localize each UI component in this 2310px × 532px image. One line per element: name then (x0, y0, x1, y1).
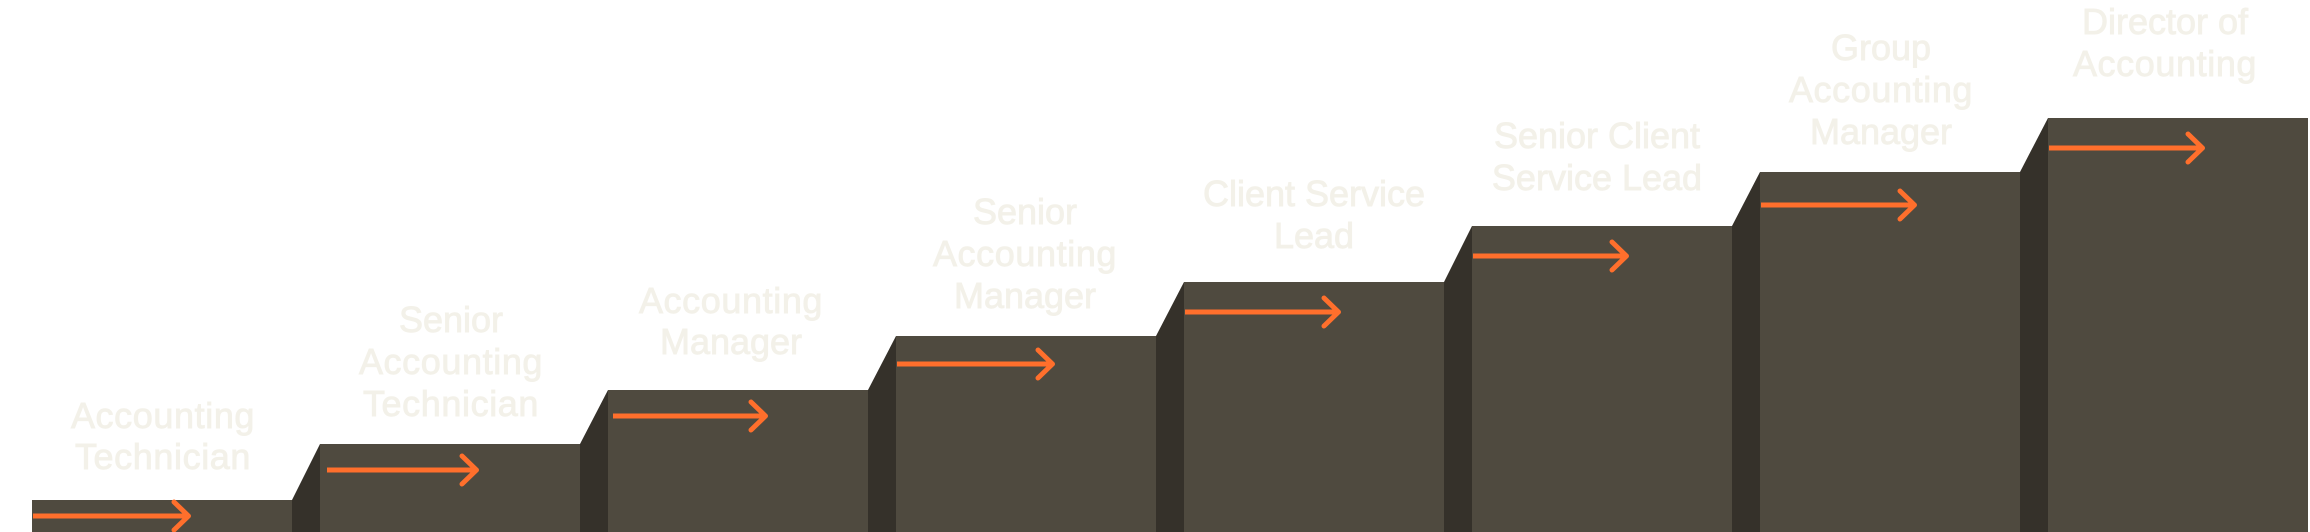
step 3: Accounting Manager (580, 280, 868, 532)
step 6 riser (1444, 226, 1472, 532)
step 7 arrow (1761, 191, 1914, 219)
step 4: Senior Accounting Manager (868, 191, 1156, 532)
step 7 label: Manager (1810, 111, 1952, 152)
step 2: Senior Accounting Technician (292, 299, 580, 532)
step 3 arrow (613, 402, 766, 430)
step 6 label: Service Lead (1492, 157, 1702, 198)
step 7 label: Accounting (1789, 69, 1973, 110)
step 7 block (1760, 172, 2020, 532)
step 1 label: Technician (75, 436, 251, 477)
step 1 label: Accounting (71, 395, 255, 436)
step 5 riser (1156, 282, 1184, 532)
step 3 block (608, 390, 868, 532)
step 5 block (1184, 282, 1444, 532)
step 8 label: Accounting (2073, 43, 2257, 84)
step 4 label: Manager (954, 275, 1096, 316)
step 7 riser (1732, 172, 1760, 532)
step 4 arrow (897, 350, 1052, 378)
step 8: Director of Accounting (2020, 1, 2308, 532)
step 2 label: Accounting (359, 341, 543, 382)
step 5 label: Lead (1274, 215, 1354, 256)
step 4 block (896, 336, 1156, 532)
step 2 label: Senior (399, 299, 503, 340)
step 1 block (32, 500, 292, 532)
step 8 arrow (2049, 134, 2202, 162)
step 3 label: Accounting (639, 280, 823, 321)
step 8 block (2048, 118, 2308, 532)
step 4 riser (868, 336, 896, 532)
step 2 block (320, 444, 580, 532)
step 2 arrow (327, 456, 476, 484)
step 2 riser (292, 444, 320, 532)
step 8 label: Director of (2082, 1, 2249, 42)
step 1 arrow (33, 502, 188, 530)
step 3 riser (580, 390, 608, 532)
step 6: Senior Client Service Lead (1444, 115, 1732, 532)
step 6 label: Senior Client (1494, 115, 1700, 156)
step 7: Group Accounting Manager (1732, 27, 2020, 532)
step 5 arrow (1185, 298, 1338, 326)
step 7 label: Group (1831, 27, 1931, 68)
step 6 block (1472, 226, 1732, 532)
step 1: Accounting Technician (32, 395, 292, 532)
step 4 label: Accounting (933, 233, 1117, 274)
step 5: Client Service Lead (1156, 173, 1444, 532)
step 8 riser (2020, 118, 2048, 532)
step 5 label: Client Service (1203, 173, 1425, 214)
step 4 label: Senior (973, 191, 1077, 232)
step 2 label: Technician (363, 383, 539, 424)
step 6 arrow (1473, 242, 1626, 270)
step 3 label: Manager (660, 321, 802, 362)
